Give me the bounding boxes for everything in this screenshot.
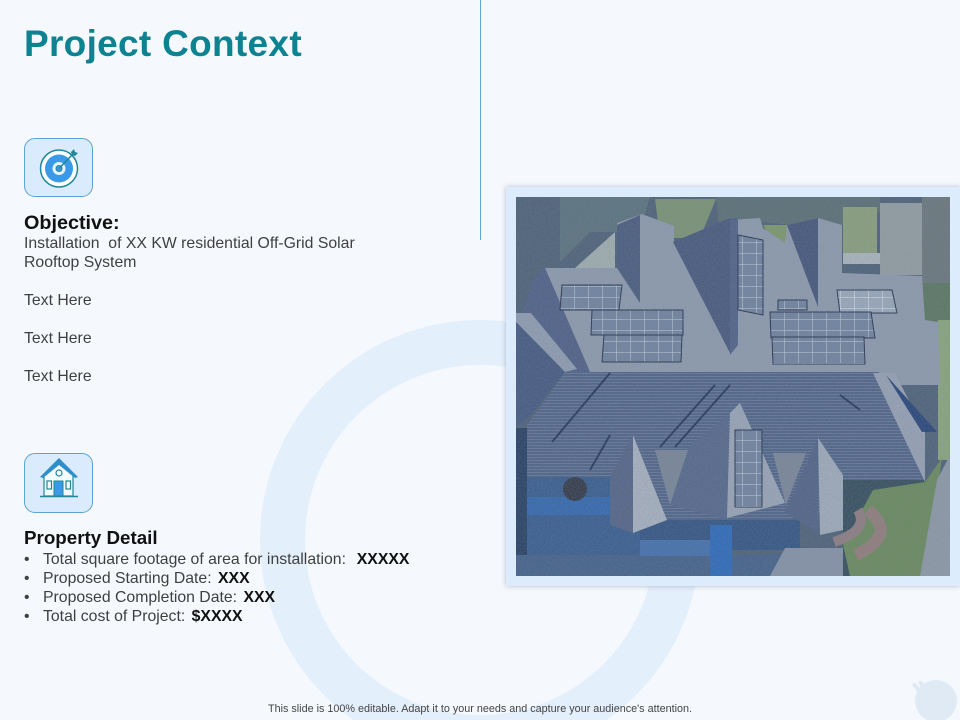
aerial photo of roof with solar panels — [516, 197, 950, 576]
property detail bullet list: • — [24, 608, 30, 625]
solar panels — [560, 235, 897, 507]
photo frame — [506, 187, 960, 586]
lower dark roof — [527, 372, 923, 533]
icon: house — [24, 453, 93, 513]
footer note: This slide is 100% editable. Adapt it to your needs and capture your audience's attention. — [268, 703, 692, 715]
property detail bullet list: Proposed Starting Date: XXX — [43, 570, 250, 587]
property detail bullet list: • — [24, 589, 30, 606]
vertical divider line — [480, 0, 481, 240]
lawn, driveway and garden — [834, 455, 950, 576]
heading: property detail: Property Detail — [24, 527, 158, 548]
property detail bullet list: Total cost of Project: $XXXX — [43, 608, 243, 625]
property detail bullet list: • — [24, 570, 30, 587]
heading: objective: Objective: — [24, 212, 120, 234]
property detail bullet list: Total square footage of area for installation: XXXXX — [43, 551, 409, 568]
corner hand graphic — [912, 680, 957, 720]
objective text block — [24, 235, 355, 385]
property detail bullet list: Proposed Completion Date: XXX — [43, 589, 275, 606]
objective text block: Text Here — [24, 330, 92, 347]
property detail bullet list — [24, 551, 410, 625]
upper light roof — [545, 214, 940, 385]
objective text block: Rooftop System — [24, 254, 136, 271]
objective text block: Installation of XX KW residential Off-Grid Solar — [24, 235, 355, 252]
title: Project Context — [24, 23, 302, 64]
objective text block: Text Here — [24, 368, 92, 385]
objective text block: Text Here — [24, 292, 92, 309]
icon: target — [24, 138, 93, 197]
property detail bullet list: • — [24, 551, 30, 568]
